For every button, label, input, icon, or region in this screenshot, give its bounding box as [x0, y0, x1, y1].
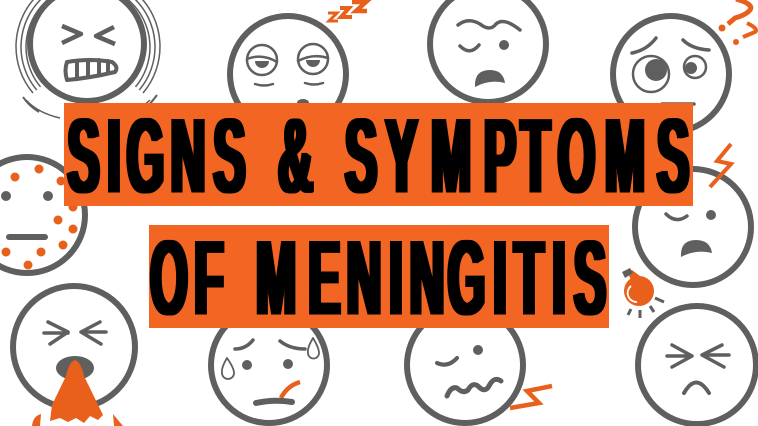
heading: signs and symptoms: SIGNS & SYMPTOMS: [67, 96, 689, 216]
icon: headache face with lightning bolt: [635, 144, 751, 285]
icon: photophobia light bulb: [622, 268, 664, 318]
icon: sleepy face with zzz: [230, 2, 367, 132]
banner: of meningitis: [149, 218, 609, 338]
heading: of meningitis: OF MENINGITIS: [150, 218, 606, 338]
banner: signs and symptoms: [64, 96, 693, 216]
icon: squinting face: [638, 306, 756, 424]
icon: face with rash spots: [0, 157, 85, 273]
icon: nauseous wavy-mouth face with lightning bolt: [407, 307, 552, 423]
icon: dizzy winking face: [430, 0, 546, 102]
icon: confused face with question marks: [613, 0, 756, 132]
icon: sweating face with thermometer: [211, 307, 327, 423]
icon: grimacing face with vibration rings: [16, 0, 160, 118]
icon: vomiting face: [13, 286, 135, 426]
